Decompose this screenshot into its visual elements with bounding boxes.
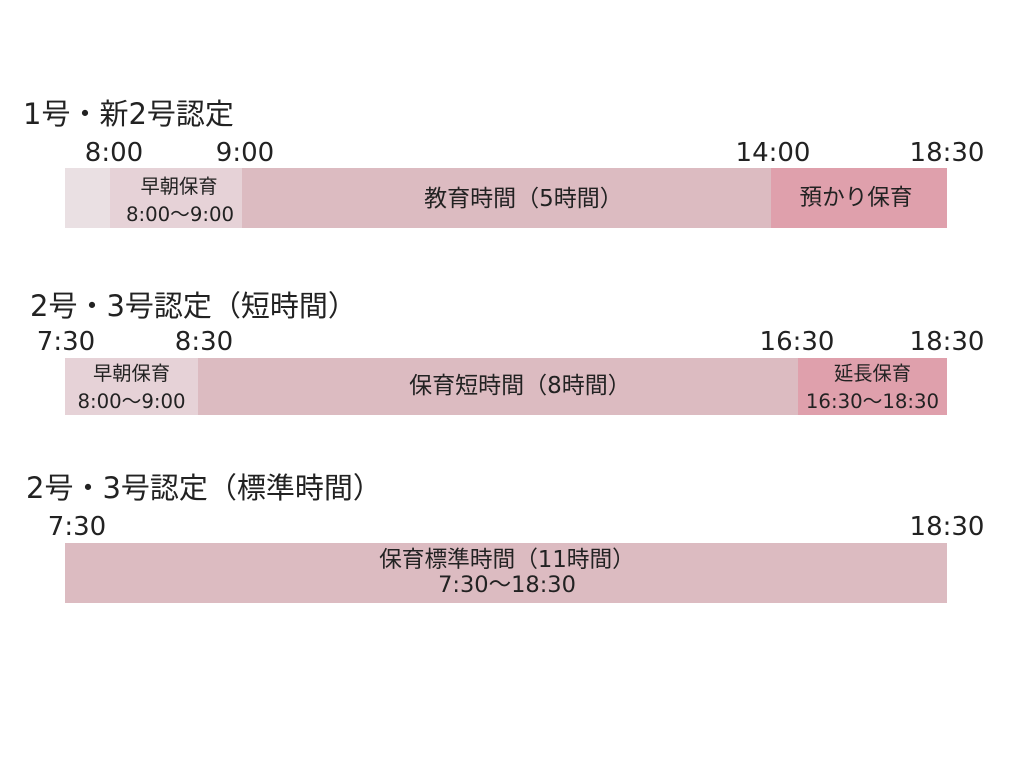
bar segment: 教育時間 [242, 168, 771, 228]
section: 2号・3号認定（標準時間） [26, 471, 984, 603]
bar segment: 保育標準時間: 保育標準時間（11時間） [379, 547, 635, 573]
heading: 1号・新2号認定: 1号・新2号認定 [23, 97, 234, 131]
section: 1号・新2号認定 [23, 97, 984, 228]
bar segment: 保育標準時間 [65, 543, 947, 603]
time label 7:30: 7:30 [37, 327, 95, 357]
time label 8:00: 8:00 [85, 138, 143, 168]
bar segment: 保育短時間: 保育短時間（8時間） [409, 373, 631, 399]
bar segment: 預かり保育: 預かり保育 [800, 185, 912, 211]
time label 8:30: 8:30 [175, 327, 233, 357]
bar segment: 延長保育 [798, 358, 947, 415]
bar segment: 早朝保育 [110, 168, 242, 228]
bar segment: 早朝保育 [65, 358, 198, 415]
bar segment: before 8:00 [65, 168, 110, 228]
bar segment: 早朝保育: 早朝保育 [93, 362, 170, 385]
time label 18:30: 18:30 [910, 327, 984, 357]
bar segment: 早朝保育: 8:00～9:00 [77, 390, 186, 413]
bar segment: 延長保育: 延長保育 [834, 362, 911, 385]
time label 7:30: 7:30 [48, 512, 106, 542]
time label 16:30: 16:30 [760, 327, 834, 357]
bar segment: 保育標準時間: 7:30～18:30 [438, 572, 576, 598]
bar segment: 早朝保育: 早朝保育 [140, 175, 218, 198]
time label 18:30: 18:30 [910, 138, 984, 168]
heading: 2号・3号認定（標準時間）: 2号・3号認定（標準時間） [26, 471, 382, 505]
bar segment: 早朝保育: 8:00～9:00 [126, 203, 234, 226]
time label 14:00: 14:00 [736, 138, 810, 168]
bar segment: 延長保育: 16:30～18:30 [806, 390, 939, 413]
bar segment: 保育短時間 [198, 358, 798, 415]
heading: 2号・3号認定（短時間）: 2号・3号認定（短時間） [30, 289, 357, 323]
time label 9:00: 9:00 [216, 138, 274, 168]
time label 18:30: 18:30 [910, 512, 984, 542]
bar segment: 預かり保育 [771, 168, 947, 228]
bar segment: 教育時間: 教育時間（5時間） [424, 186, 623, 212]
section: 2号・3号認定（短時間） [30, 289, 984, 415]
